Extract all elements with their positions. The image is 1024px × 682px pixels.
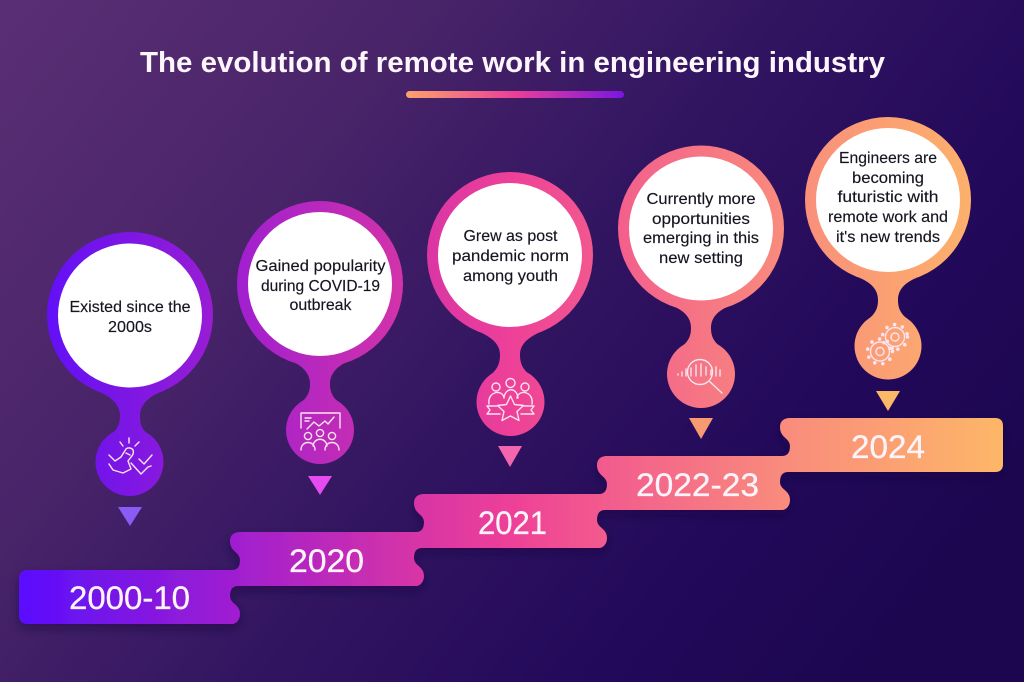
icon: magnifier over sound bars xyxy=(678,360,722,393)
year: 2024: 2024 xyxy=(851,429,925,465)
bubble text: becoming xyxy=(852,170,924,187)
bubble text: Grew as post xyxy=(464,228,558,245)
bubble ring xyxy=(47,232,213,398)
bubble text xyxy=(452,228,569,285)
bubble text: opportunities xyxy=(652,211,750,228)
pin shape xyxy=(292,361,348,406)
icon circle xyxy=(854,312,922,380)
panel: 2000-10 milestone xyxy=(47,232,213,526)
panel: 2020 milestone xyxy=(237,201,403,495)
timeline staircase xyxy=(19,418,1003,624)
bubble inner xyxy=(438,183,582,327)
bubble text: Engineers are xyxy=(839,150,937,167)
bubble ring xyxy=(427,172,593,338)
icon: arm wrestling xyxy=(109,438,152,474)
bubble text: it's new trends xyxy=(836,229,940,246)
down arrow xyxy=(118,507,142,526)
pin shape xyxy=(482,333,538,378)
panel: 2021 milestone xyxy=(427,172,593,467)
bubble text: new setting xyxy=(659,250,743,267)
bubble inner xyxy=(248,212,392,356)
title underline xyxy=(406,91,624,98)
down arrow xyxy=(498,446,522,467)
stair ribbon xyxy=(19,418,1003,624)
bubble text: 2000s xyxy=(108,319,152,336)
bubble text xyxy=(256,258,386,314)
bubble text: Currently more xyxy=(646,191,756,208)
year: 2021: 2021 xyxy=(478,505,547,541)
bubble ring xyxy=(618,146,784,312)
bubble text: during COVID-19 xyxy=(261,278,380,295)
bubble text: pandemic norm xyxy=(452,248,569,265)
icon circle xyxy=(476,368,544,436)
bubble text xyxy=(828,150,948,246)
panel: 2022-23 milestone xyxy=(618,146,784,439)
pin shape xyxy=(673,306,729,350)
bubble text: among youth xyxy=(463,268,558,285)
bubble text: remote work and xyxy=(828,209,948,226)
icon: gears xyxy=(868,324,908,364)
bubble text: futuristic with xyxy=(838,189,938,206)
down arrow xyxy=(689,418,713,439)
bubble text: Existed since the xyxy=(70,299,191,316)
panel: 2024 milestone xyxy=(805,117,971,411)
icon circle xyxy=(286,396,354,464)
year: 2000-10: 2000-10 xyxy=(69,580,190,616)
bubble inner xyxy=(816,128,960,272)
icon circle xyxy=(667,340,735,408)
bubble ring xyxy=(805,117,971,283)
pin shape xyxy=(860,278,916,322)
bubble text: emerging in this xyxy=(643,230,759,247)
bubble inner xyxy=(58,244,202,388)
bubble text: outbreak xyxy=(290,297,352,314)
icon circle xyxy=(96,428,164,496)
pin shape xyxy=(102,393,158,438)
year: 2022-23: 2022-23 xyxy=(636,467,759,503)
down arrow xyxy=(876,391,900,411)
icon: team star xyxy=(487,378,534,420)
bubble ring xyxy=(237,201,403,367)
down arrow xyxy=(308,476,332,495)
icon: presentation audience xyxy=(301,413,340,450)
bubble text: Gained popularity xyxy=(256,258,386,275)
year: 2020: 2020 xyxy=(289,543,364,579)
bubble text xyxy=(70,299,191,336)
bubble inner xyxy=(629,156,773,300)
title: The evolution of remote work in engineering industry xyxy=(140,47,885,79)
bubble text xyxy=(643,191,759,267)
